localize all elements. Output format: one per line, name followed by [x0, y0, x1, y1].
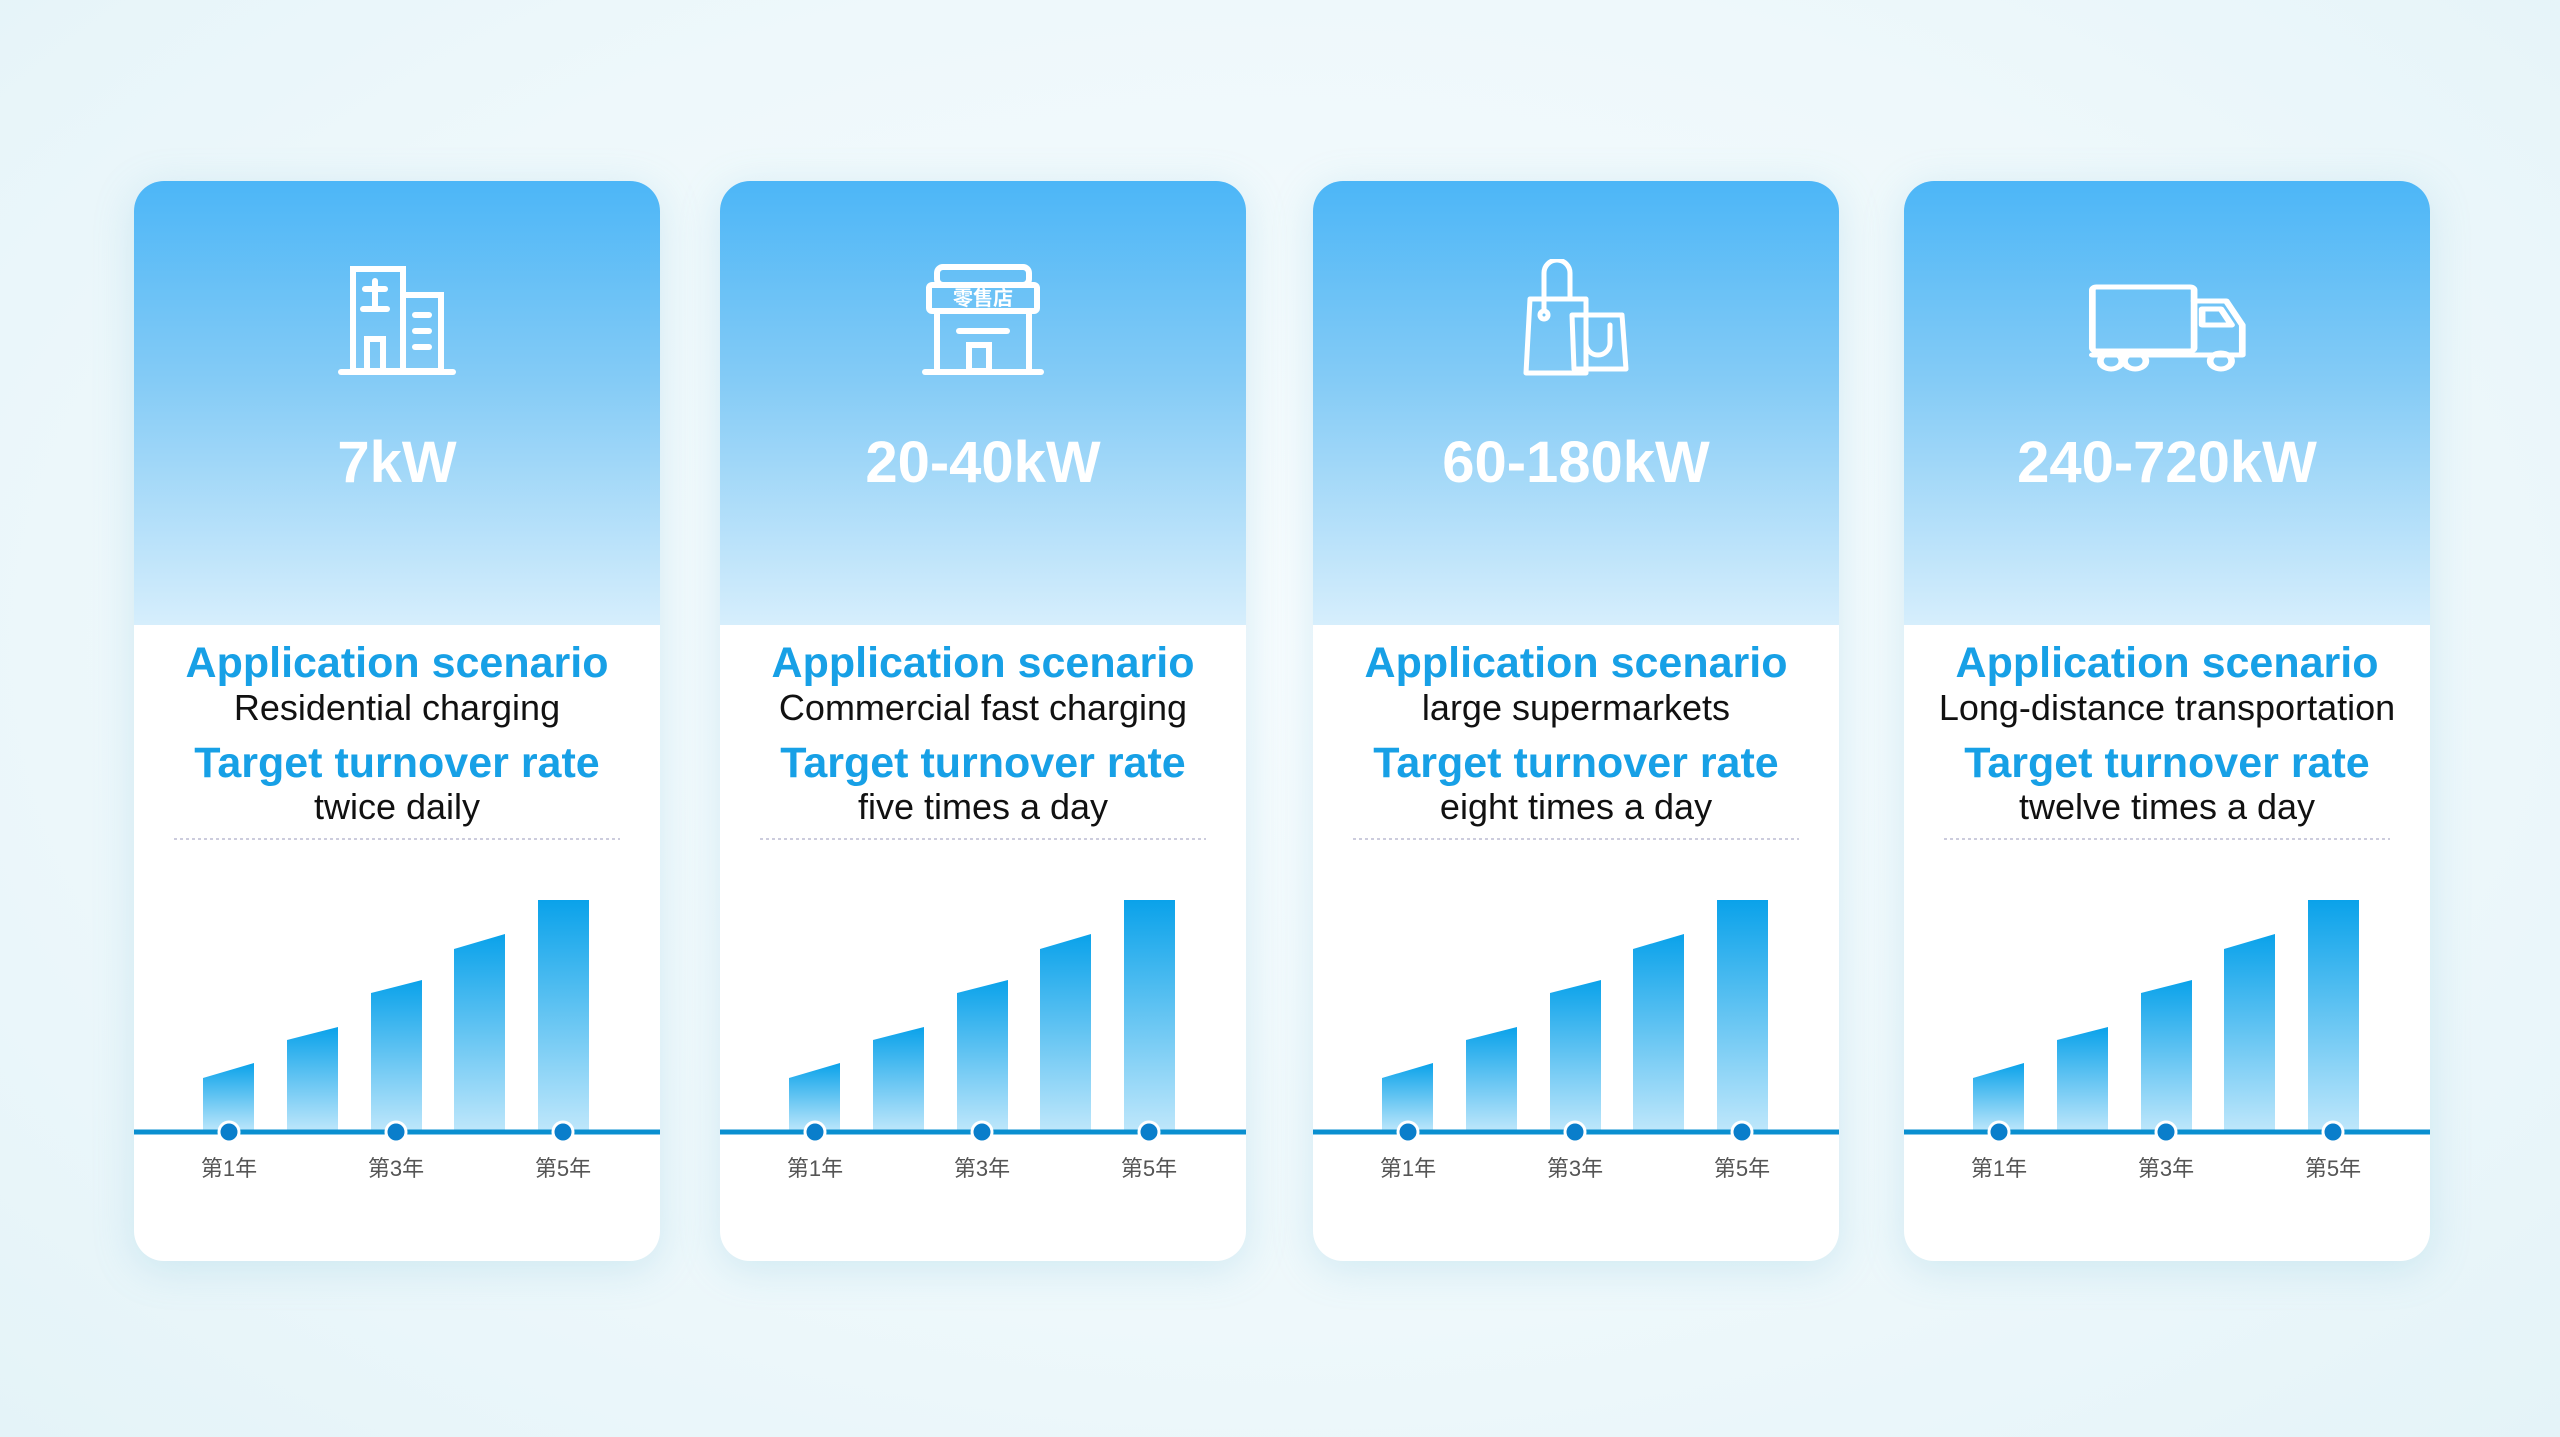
- text: application scenario: Application scenario: [772, 639, 1194, 687]
- text: turnover value: twice daily: [314, 786, 480, 827]
- text: turnover value: twelve times a day: [2019, 786, 2315, 827]
- icon: truck: [2089, 284, 2246, 372]
- text: scenario value: large supermarkets: [1422, 687, 1730, 728]
- text: target turnover label: Target turnover rate: [1964, 739, 2370, 787]
- bar chart: 第5年: [535, 1156, 591, 1181]
- text: turnover value: eight times a day: [1440, 786, 1712, 827]
- bar chart: 第3年: [368, 1156, 424, 1181]
- header: 60-180kW: [1313, 181, 1839, 625]
- bar chart: 第5年: [2305, 1156, 2361, 1181]
- text: scenario value: Long-distance transportation: [1939, 687, 2395, 728]
- icon: retail store: [922, 264, 1044, 375]
- header: 20-40kW: [720, 181, 1246, 625]
- bar chart: [1313, 838, 1839, 1181]
- bar chart: 第3年: [954, 1156, 1010, 1181]
- bar chart: 第1年: [1971, 1156, 2027, 1181]
- power value: 20-40kW: [865, 430, 1101, 495]
- header: 7kW: [134, 181, 660, 625]
- bar chart: [720, 838, 1246, 1181]
- text: target turnover label: Target turnover rate: [1373, 739, 1779, 787]
- text: scenario value: Commercial fast charging: [779, 687, 1187, 728]
- bar chart: 第3年: [2138, 1156, 2194, 1181]
- card 3: 60-180kW: [1313, 181, 1839, 1261]
- text: target turnover label: Target turnover rate: [780, 739, 1186, 787]
- power value: 7kW: [337, 430, 457, 495]
- text: turnover value: five times a day: [858, 786, 1108, 827]
- icon: buildings: [338, 266, 456, 375]
- card 2: 20-40kW: [720, 181, 1246, 1261]
- bar chart: 第1年: [787, 1156, 843, 1181]
- bar chart: 第1年: [201, 1156, 257, 1181]
- bar chart: 第3年: [1547, 1156, 1603, 1181]
- text: application scenario: Application scenario: [186, 639, 608, 687]
- power value: 240-720kW: [2017, 430, 2317, 495]
- card 4: 240-720kW: [1904, 181, 2430, 1261]
- header: 240-720kW: [1904, 181, 2430, 625]
- text: application scenario: Application scenario: [1956, 639, 2378, 687]
- bar chart: 第5年: [1714, 1156, 1770, 1181]
- bar chart: [134, 838, 660, 1181]
- icon: retail store: 零售店: [953, 282, 1013, 311]
- bar chart: [1904, 838, 2430, 1181]
- icon: shopping bags: [1524, 259, 1628, 376]
- bar chart: 第5年: [1121, 1156, 1177, 1181]
- text: application scenario: Application scenario: [1365, 639, 1787, 687]
- text: target turnover label: Target turnover rate: [194, 739, 600, 787]
- card 1: 7kW: [134, 181, 660, 1261]
- power value: 60-180kW: [1442, 430, 1710, 495]
- text: scenario value: Residential charging: [234, 687, 560, 728]
- bar chart: 第1年: [1380, 1156, 1436, 1181]
